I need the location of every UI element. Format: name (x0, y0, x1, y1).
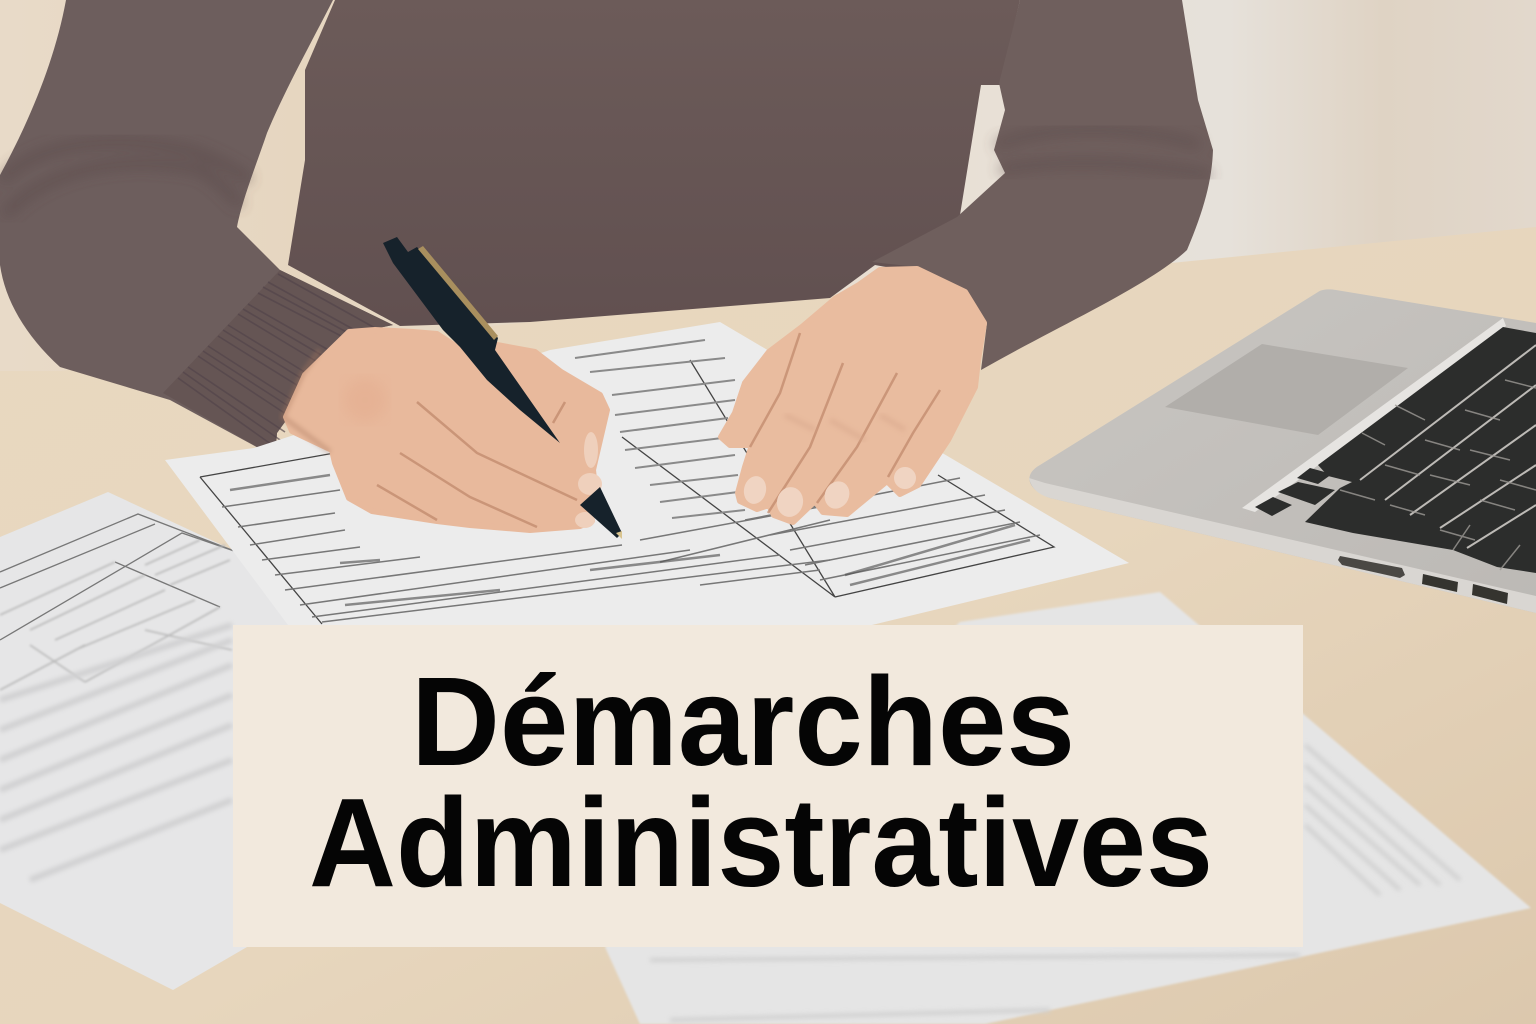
laptop front edge (1029, 478, 1536, 613)
right sleeve (872, 0, 1213, 370)
title: Administratives (309, 772, 1213, 913)
laptop ports (1338, 556, 1508, 604)
bottom right background paper (605, 592, 1531, 1024)
pen (383, 237, 622, 539)
wall background (0, 0, 1536, 400)
keyboard (1255, 327, 1536, 573)
main form paper (165, 322, 1129, 625)
middle nail (575, 512, 595, 528)
title panel (233, 625, 1303, 947)
laptop base (1029, 289, 1536, 613)
title (309, 651, 1213, 913)
right hand (721, 269, 984, 522)
sweater torso (288, 0, 1020, 326)
fingernails (741, 463, 920, 519)
form rows right (745, 478, 1040, 580)
thumb nail (584, 432, 598, 468)
writing hand (283, 237, 622, 539)
left sleeve (0, 0, 393, 457)
trackpad (1165, 344, 1408, 435)
form rows centre (575, 340, 745, 518)
index nail (578, 473, 602, 495)
desk (0, 227, 1536, 1024)
form frame (200, 360, 1054, 624)
keyboard hinge strip (1242, 318, 1506, 512)
left background paper (0, 492, 293, 990)
sleeve cuff (163, 270, 393, 457)
title: Démarches (411, 651, 1075, 792)
laptop (1029, 289, 1536, 613)
form rows left (222, 490, 830, 622)
